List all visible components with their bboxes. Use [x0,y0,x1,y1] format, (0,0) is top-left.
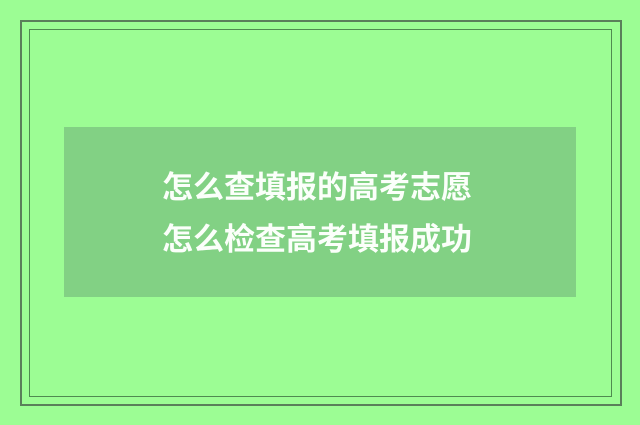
title panel [64,127,576,297]
title line 2: 怎么检查高考填报成功 [162,222,472,257]
inner frame [29,29,612,397]
title line 1: 怎么查填报的高考志愿 [162,170,472,205]
